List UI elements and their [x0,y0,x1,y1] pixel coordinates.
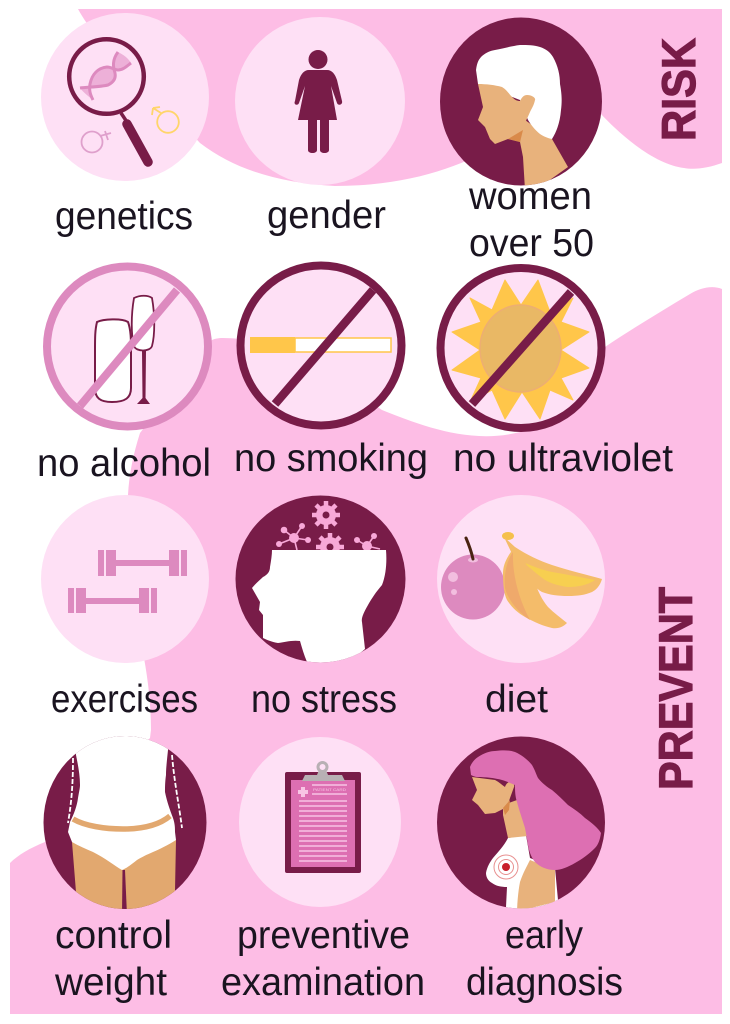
icon: woman with breast marker [437,736,605,915]
label: no stress: no stress [251,678,397,721]
label: no ultraviolet: no ultraviolet [453,437,673,480]
label: women over 50 [468,175,594,265]
icon: plum and bananas [437,495,605,663]
heading: PREVENT: PREVENT [649,587,702,790]
item: no ultraviolet [440,268,673,480]
label: control weight: control [55,914,172,957]
heading: RISK: RISK [652,38,705,141]
icon: waist with measuring tape [44,730,206,915]
item: no smoking [234,266,428,480]
item: no alcohol [37,266,211,485]
icon: woman figure [235,17,405,185]
label: preventive examination: preventive [237,914,410,957]
icon: crossed sun [440,268,602,428]
icon: head with gears [236,496,406,670]
item: early diagnosis [437,736,623,1004]
item: no stress [236,496,406,721]
label: no alcohol: no alcohol [37,442,211,485]
icon: patient card clipboard: PATIENT CARD [313,787,346,792]
label: no smoking: no smoking [234,437,428,480]
item: preventive examination [221,737,425,1004]
label: preventive examination [221,914,425,1004]
label: preventive examination: examination [221,961,425,1004]
label: early diagnosis: diagnosis [466,961,623,1004]
item: gender [235,17,405,237]
label: women over 50: over 50 [469,222,594,265]
label: early diagnosis: early [505,914,583,957]
item: women over 50 [440,18,602,265]
icon: crossed cigarette [240,266,402,426]
icon: older woman profile [440,18,602,190]
label: diet: diet [485,678,548,721]
label: gender: gender [267,194,386,237]
label: early diagnosis [466,914,623,1004]
label: women over 50: women [468,175,592,218]
item: control weight [44,730,206,1004]
label: exercises: exercises [51,678,198,721]
label: control weight: weight [54,961,167,1004]
panel: prevent background [10,287,722,1014]
item: genetics [41,13,209,238]
item: diet [437,495,605,721]
icon: patient card clipboard [239,737,401,907]
icon: magnifier over DNA [41,13,209,181]
item: exercises [41,495,209,721]
icon: crossed glasses [47,266,208,426]
icon: dumbbells [41,495,209,663]
label: genetics: genetics [55,195,193,238]
label: control weight [54,914,172,1004]
panel: risk background [78,9,722,186]
